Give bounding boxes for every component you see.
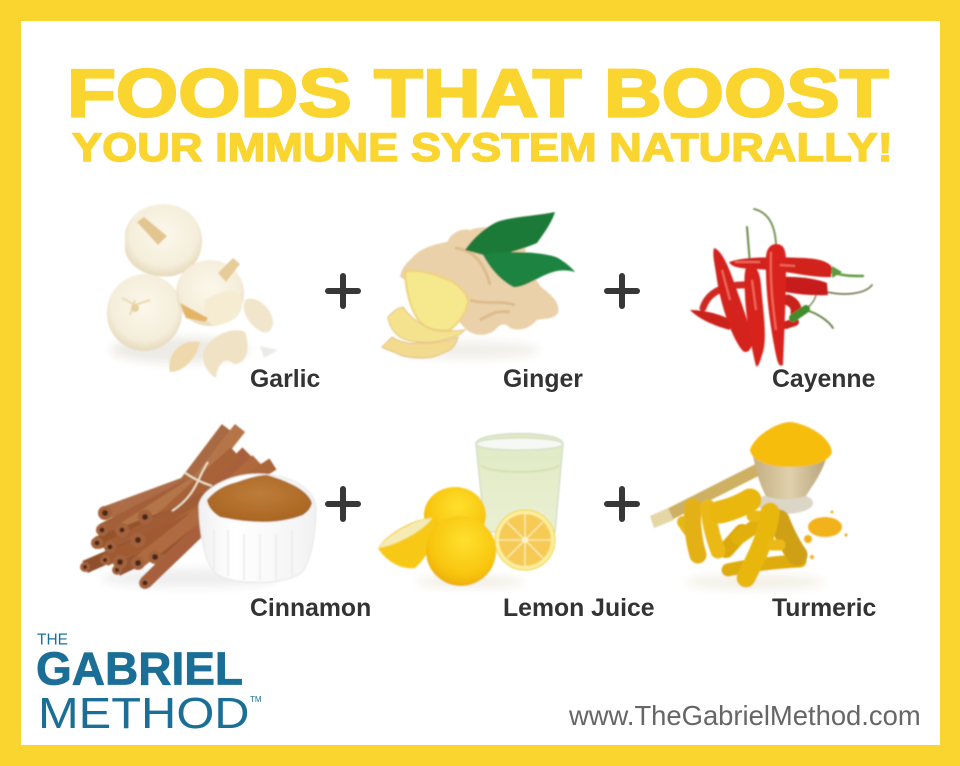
icon: garlic <box>107 204 278 378</box>
icon: cinnamon <box>80 428 316 589</box>
title <box>67 55 893 170</box>
logo: The Gabriel Method: METHOD <box>38 688 250 737</box>
label: Garlic: Garlic <box>250 366 321 393</box>
label: Cayenne: Cayenne <box>772 366 875 393</box>
logo: The Gabriel Method: TM <box>250 695 262 704</box>
label: Cinnamon: Cinnamon <box>250 595 371 622</box>
icon: plus <box>604 273 640 309</box>
icon: plus <box>604 486 640 522</box>
icon: plus <box>325 486 361 522</box>
logo: The Gabriel Method <box>36 632 262 737</box>
icon: turmeric <box>650 422 848 589</box>
logo: The Gabriel Method: GABRIEL <box>36 642 243 694</box>
website URL: www.TheGabrielMethod.com <box>568 700 921 731</box>
title: FOODS THAT BOOST <box>67 55 889 131</box>
icon: cayenne <box>690 209 872 366</box>
label: Lemon Juice: Lemon Juice <box>503 595 655 622</box>
logo: The Gabriel Method: THE <box>37 632 68 648</box>
icon: plus <box>325 273 361 309</box>
icon: ginger <box>382 212 575 359</box>
icon: lemon juice <box>378 434 563 587</box>
label: Ginger: Ginger <box>503 366 583 393</box>
subtitle: YOUR IMMUNE SYSTEM NATURALLY! <box>72 125 893 170</box>
label: Turmeric: Turmeric <box>772 595 876 622</box>
